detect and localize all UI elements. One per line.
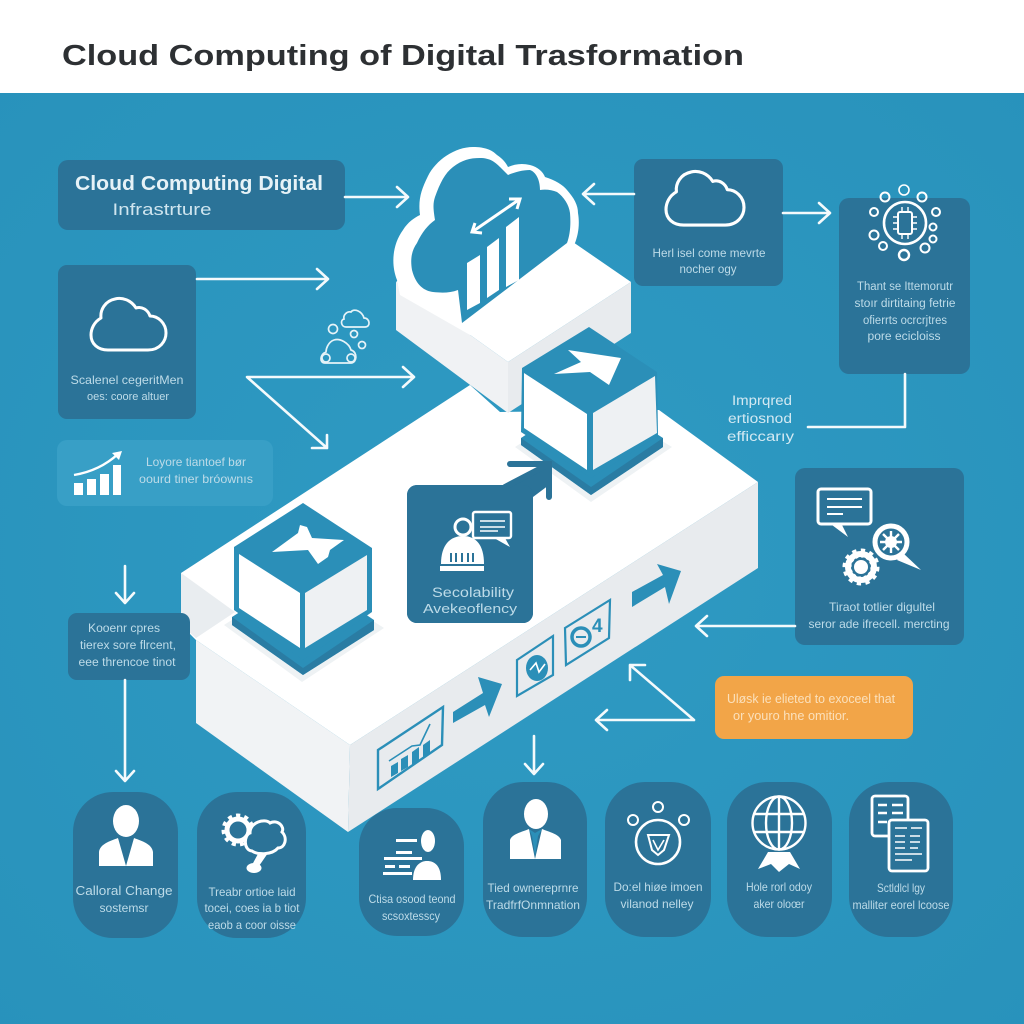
text: scalable [70,373,184,403]
icon: cloud [666,171,744,225]
icon: arrow mark on upper cube [554,350,621,385]
isometric face icon: badge [517,636,553,696]
text: card 1: sostemsr [100,901,148,915]
icon: double arrow in cloud [472,199,520,233]
text: card 3 [368,892,456,923]
upper cube [515,327,672,502]
text: card 7: malliter eorel lcoose [852,898,950,912]
text: chip card: ofierrts ocrcrjtres [863,315,947,327]
panel: bottom card 7 [849,782,953,937]
arrow to cube [505,464,549,497]
icon: gear [847,553,875,581]
text: card 5: vilanod nelley [620,897,694,911]
panel: left note: tierex sore flrcent, [80,640,176,652]
panel: scalability card with arrow [407,463,549,623]
icon: rising bars in cloud [467,217,519,310]
text: chip card: stoır dirtitaing fetrie [854,298,956,310]
panel: bottom card 2 [197,792,306,938]
arrow: forked [247,367,414,448]
text: chip card [854,281,956,343]
isometric arrow 1 [453,677,502,723]
icon: list with person [383,830,441,880]
text: growth [139,455,253,486]
icon: cloud [91,298,166,350]
text: card 2: Treabr ortioe laid [208,885,296,899]
arrow: digital card to platform [696,616,795,636]
text: scalability: Avekeoflency [423,601,518,616]
panel: scalable [58,265,196,419]
callout: orange note: or youro hne omitior. [733,709,849,723]
arrow: orange note triangle [596,665,694,730]
title: Cloud Computing of Digital Trasformation [62,40,744,72]
arrow: down to left note [116,566,134,603]
text: cloud top right: nocher ogy [680,262,736,276]
arrow: card to cloud [583,184,634,204]
arrow: down to persons [525,736,543,774]
panel: left note: eee threncoe tinot [78,657,176,669]
isometric face icon: chart [378,707,443,789]
icon: growth bars [74,451,122,495]
callout: orange note: Uløsk ie elieted to exoceel that [727,692,896,706]
icon: documents [872,796,928,871]
text: card 7 [852,881,950,912]
text: scalable: Scalenel cegeritMen [70,373,184,387]
panel: bottom card 4 [483,782,587,937]
text: improved efficiency: Imprqred [732,393,792,408]
text: chip card: Thant se Ittemorutr [857,281,953,293]
isometric arrow 2 [632,564,681,607]
text: card 3: Ctisa osood teond [368,892,456,906]
arrow: title to cloud [345,187,408,207]
connector: chip card to improved efficiency [808,374,905,427]
text: card 4: TradfrfOnmnation [486,898,580,912]
text: card 5: Do:el hiøe imoen [614,880,702,894]
icon: gear and cloud [224,816,285,873]
text: growth: oourd tiner bróownıs [139,472,253,486]
panel: left note: Kooenr cpres [88,623,160,635]
big cloud icon [393,147,579,335]
panel: growth note [57,440,273,506]
text: card 7: Sctldlcl lgy [877,881,925,895]
icon: speech bubble [818,489,871,537]
icon: globe with ribbon [752,796,806,872]
text: cloud top right [652,246,766,276]
panel: bottom card 3 [359,808,464,936]
icon: small cloud cluster [321,310,369,363]
panel: digital card [795,468,964,645]
text: growth: Loyore tiantoef bør [146,455,246,469]
text: improved efficiency: efficcarıy [727,429,794,444]
callout: orange note [715,676,913,739]
arrow: scalable to right [197,269,328,289]
isometric platform: upper [396,230,631,413]
text: card 2 [204,885,300,932]
text: scalability [423,585,518,616]
lower cube [224,503,384,682]
panel: bottom card 6 [727,782,832,937]
panel: bottom card 5 [605,782,711,937]
text: scalable: oes: coore altuer [87,391,169,403]
text: chip card: pore ecicloiss [868,331,941,343]
isometric face icon: chat and number: 4 [592,616,603,637]
panel: infrastructure title: Infrastrture [112,200,212,219]
arrow: card to chip card [783,203,830,223]
panel: infrastructure title [58,160,345,230]
text: card 4 [486,881,580,912]
text: scalability: Secolability [432,585,514,600]
icon: star mark on lower cube [272,525,344,564]
icon: chip ring [870,185,940,260]
panel: bottom card 1 [73,792,178,938]
text: card 3: scsoxtesscy [382,909,440,923]
text: card 2: tocei, coes ia b tiot [204,901,300,915]
text: digital card [808,600,950,631]
icon: circle with shield [628,802,689,864]
text: cloud top right: Herl isel come mevrte [652,246,766,260]
text: digital card: seror ade ifrecell. mercting [808,617,950,631]
text: card 5 [614,880,702,911]
text: card 1 [76,883,172,915]
icon: person with speech bubble [440,512,511,571]
text: card 6 [746,880,812,911]
panel: chip card [839,185,970,374]
arrow: left note to person [116,680,134,781]
panel: cloud top right [634,159,783,286]
text: card 6: Hole rorl odoy [746,880,812,894]
icon: businessperson [99,805,153,866]
icon: businessperson [510,799,561,859]
text: card 1: Calloral Change [76,883,172,898]
isometric platform: lower large [181,385,758,832]
text: card 2: eaob a coor oisse [208,918,296,932]
panel: left note [68,613,190,680]
panel: infrastructure title: Cloud Computing Digital [75,173,323,195]
text: improved efficiency: ertiosnod [728,411,792,426]
icon: magnifier with asterisk [875,526,921,570]
isometric face icon: chat and number [565,600,610,665]
text: improved efficiency [727,393,794,444]
text: card 6: aker oloœr [754,897,805,911]
text: card 4: Tied ownereprnre [488,881,579,895]
text: digital card: Tiraot totlier digultel [829,600,935,614]
